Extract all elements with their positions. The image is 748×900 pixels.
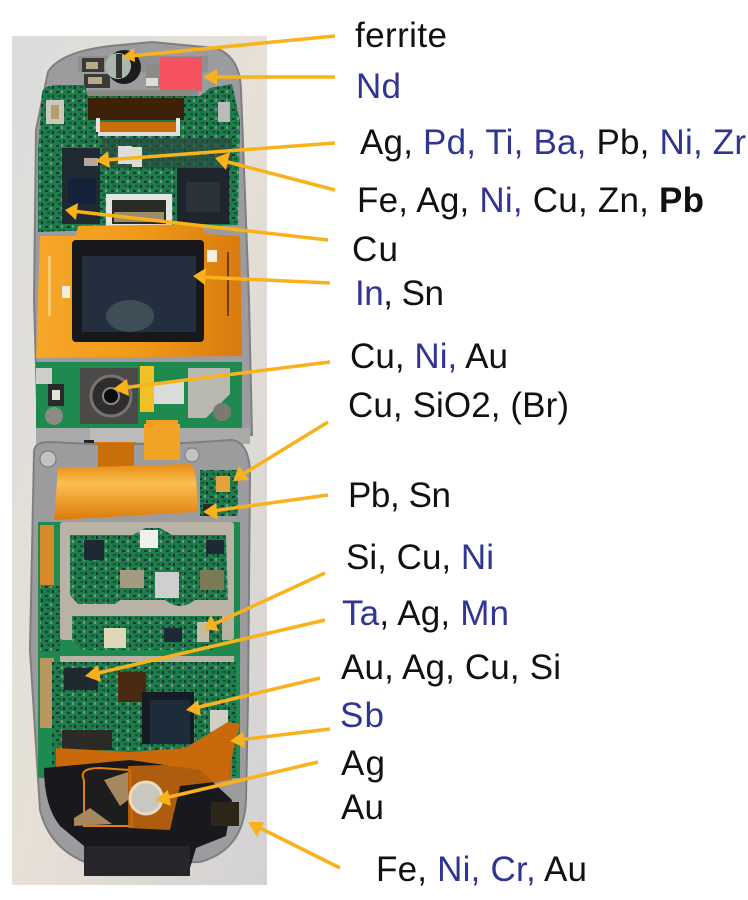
arrow: Fe Ni Cr Au: [248, 822, 340, 868]
label: Cu Ni Au: Cu, Ni, Au: [350, 337, 508, 376]
arrow: Au Ag Cu Si: [186, 678, 320, 716]
small green board with gold pad: [200, 470, 238, 516]
label: Sb: Sb: [340, 696, 384, 735]
arrow: Cu Ni Au: [113, 362, 330, 396]
upper phone housing: [34, 42, 252, 435]
label: Cu: Cu: [352, 230, 398, 269]
label: Ta Ag Mn: Ta, Ag, Mn: [342, 594, 509, 633]
phone photograph: [12, 36, 267, 885]
lower circuit board: [38, 522, 240, 778]
camera module board: [36, 362, 242, 432]
lower phone housing: [30, 440, 250, 864]
upper circuit board: [38, 84, 240, 232]
label: ferrite: ferrite: [355, 16, 447, 55]
arrow: Sb: [230, 729, 330, 748]
label: Pb Sn: Pb, Sn: [348, 476, 451, 515]
hinge flex cable: [40, 424, 199, 520]
label: Si Cu Ni: Si, Cu, Ni: [346, 538, 494, 577]
label: Nd: Nd: [356, 67, 401, 106]
arrow: Nd: [203, 69, 335, 85]
top assembly: speaker, magnet: [78, 50, 208, 97]
label: Au Ag Cu Si: Au, Ag, Cu, Si: [341, 648, 561, 687]
label: Au: Au: [341, 788, 384, 827]
label: Ag: Ag: [341, 744, 385, 783]
arrow: Cu: [65, 203, 328, 240]
hinge: [36, 420, 250, 472]
label: Cu SiO2 Br: Cu, SiO2, (Br): [348, 386, 569, 425]
lower flex cable and keypad connector: [44, 722, 240, 876]
arrow: Pb Sn: [203, 495, 328, 520]
label: Fe Ni Cr Au: Fe, Ni, Cr, Au: [376, 850, 587, 889]
arrow: Ag: [155, 762, 318, 806]
arrow: Si Cu Ni: [204, 573, 325, 631]
arrow: Ag group: [96, 143, 335, 168]
label: Ag group: Ag, Pd, Ti, Ba, Pb, Ni, Zr: [360, 123, 746, 162]
label: Fe group: Fe, Ag, Ni, Cu, Zn, Pb: [357, 181, 704, 220]
arrow: Cu SiO2 Br: [233, 422, 328, 481]
LCD display with orange flex: [36, 224, 242, 358]
arrow: In Sn: [193, 268, 330, 285]
label: In Sn: In, Sn: [355, 274, 444, 313]
arrow: Ta Ag Mn: [85, 620, 325, 682]
metal shield frame: [60, 522, 234, 650]
arrow: ferrite: [122, 36, 335, 62]
arrow: Fe group: [215, 152, 335, 190]
